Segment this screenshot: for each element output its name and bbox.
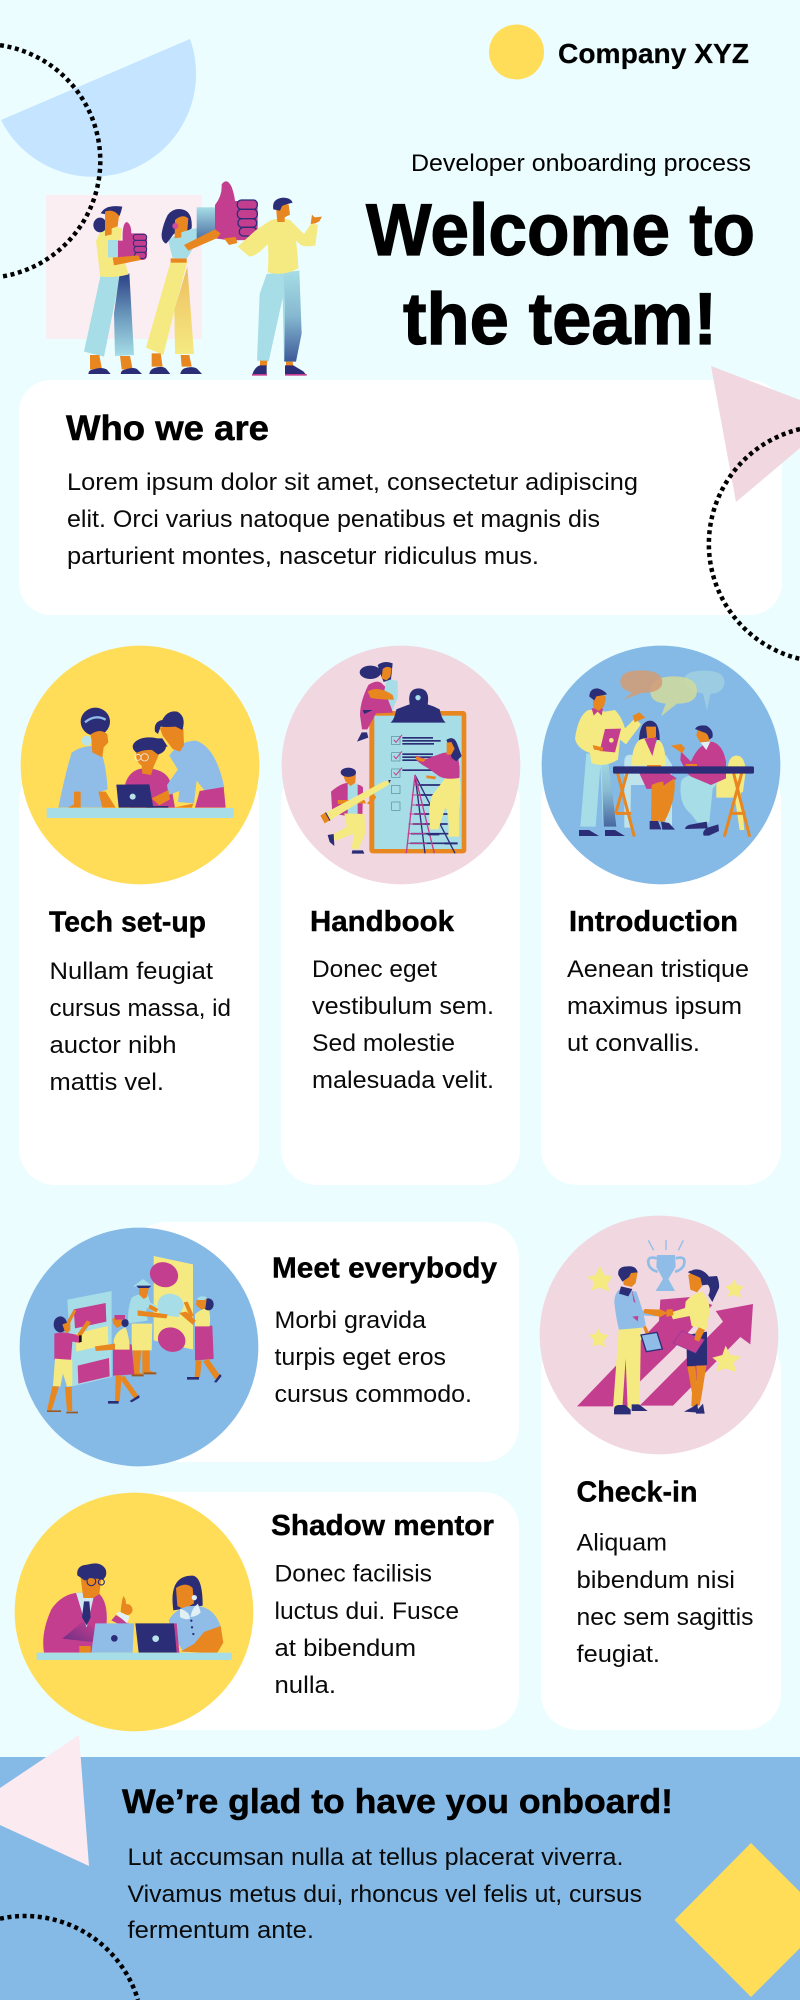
- body text: introduction: Aenean tristique: [567, 956, 749, 983]
- body text: introduction: [567, 956, 749, 1057]
- heading: tech set-up: Tech set-up: [49, 906, 206, 938]
- illustration circle: introduction: [542, 646, 780, 884]
- body text: check-in: bibendum nisi: [576, 1567, 735, 1594]
- decoration: pink square: [46, 195, 202, 339]
- body text: who we are: [67, 469, 638, 570]
- panel: footer: [0, 1735, 800, 2000]
- body text: tech set-up: [50, 958, 231, 1096]
- subtitle: Developer onboarding process: [411, 150, 751, 177]
- decoration: blue half circle: [1, 39, 196, 177]
- body text: footer: [128, 1844, 642, 1944]
- illustration circle: handbook: [282, 646, 520, 884]
- body text: check-in: nec sem sagittis: [576, 1604, 754, 1631]
- body text: handbook: Sed molestie: [312, 1030, 455, 1057]
- panel: introduction: [541, 646, 781, 1185]
- panel: tech set-up: [19, 646, 259, 1185]
- panel: shadow mentor: [15, 1492, 519, 1731]
- title: [366, 190, 755, 360]
- heading: footer: We’re glad to have you onboard!: [122, 1783, 673, 1821]
- body text: meet everybody: cursus commodo.: [274, 1381, 472, 1408]
- title: the team!: [403, 279, 717, 360]
- decoration: pale pink triangle: [0, 1735, 89, 1866]
- body text: handbook: Donec eget: [312, 956, 437, 983]
- figure: woman with thumb: [84, 206, 147, 374]
- body text: introduction: ut convallis.: [567, 1030, 700, 1057]
- body text: footer: Vivamus metus dui, rhoncus vel felis ut, cursus: [128, 1881, 642, 1908]
- body text: meet everybody: Morbi gravida: [274, 1307, 427, 1334]
- decoration: pink triangle: [711, 366, 800, 502]
- body text: check-in: [576, 1530, 754, 1668]
- body text: tech set-up: auctor nibh: [50, 1032, 176, 1059]
- illustration circle: tech set-up: [21, 646, 259, 884]
- illustration circle: shadow mentor: [15, 1493, 253, 1731]
- body text: handbook: [312, 956, 494, 1094]
- figure: woman with big thumb: [146, 181, 258, 374]
- heading: shadow mentor: Shadow mentor: [271, 1510, 494, 1542]
- decoration: yellow diamond: [674, 1843, 800, 1997]
- heading: introduction: Introduction: [569, 906, 738, 938]
- company name: Company XYZ: [558, 38, 749, 69]
- heading: meet everybody: Meet everybody: [272, 1252, 497, 1284]
- heading: handbook: Handbook: [310, 906, 454, 938]
- body text: introduction: maximus ipsum: [567, 993, 742, 1020]
- body text: footer: Lut accumsan nulla at tellus placerat viverra.: [128, 1844, 624, 1871]
- heading: who we are: Who we are: [66, 409, 269, 448]
- figure: man: [224, 198, 322, 376]
- decoration: dotted circle right: [709, 429, 800, 659]
- panel: meet everybody: [20, 1222, 519, 1466]
- panel: handbook: [281, 646, 520, 1185]
- body text: handbook: malesuada velit.: [312, 1067, 494, 1094]
- logo: company: [489, 24, 749, 80]
- body text: footer: fermentum ante.: [128, 1917, 314, 1944]
- decoration: dotted circle top left: [0, 45, 100, 277]
- body text: who we are: Lorem ipsum dolor sit amet, consectetur adipiscing: [67, 469, 638, 496]
- illustration circle: meet everybody: [20, 1228, 258, 1466]
- body text: shadow mentor: at bibendum: [274, 1635, 416, 1662]
- panel: who we are: [19, 380, 782, 615]
- body text: handbook: vestibulum sem.: [312, 993, 494, 1020]
- body text: meet everybody: turpis eget eros: [274, 1344, 446, 1371]
- title: Welcome to: [366, 190, 755, 271]
- body text: who we are: parturient montes, nascetur ridiculus mus.: [67, 543, 539, 570]
- body text: tech set-up: cursus massa, id: [50, 995, 231, 1022]
- body text: who we are: elit. Orci varius natoque penatibus et magnis dis: [67, 506, 600, 533]
- panel: check-in: [540, 1216, 781, 1730]
- illustration: team with thumbs up: [84, 181, 322, 376]
- body text: shadow mentor: Donec facilisis: [274, 1560, 432, 1588]
- decoration: dotted circle bottom left: [0, 1916, 138, 2000]
- illustration circle: check-in: [540, 1216, 778, 1454]
- logo mark: yellow circle: [489, 24, 544, 80]
- body text: check-in: feugiat.: [576, 1641, 660, 1668]
- body text: check-in: Aliquam: [576, 1530, 667, 1556]
- body text: shadow mentor: luctus dui. Fusce: [274, 1598, 459, 1625]
- heading: check-in: Check-in: [576, 1476, 698, 1508]
- body text: meet everybody: [274, 1307, 472, 1408]
- body text: tech set-up: Nullam feugiat: [50, 958, 213, 985]
- body text: shadow mentor: nulla.: [274, 1672, 336, 1699]
- body text: shadow mentor: [274, 1560, 459, 1699]
- body text: tech set-up: mattis vel.: [50, 1069, 164, 1096]
